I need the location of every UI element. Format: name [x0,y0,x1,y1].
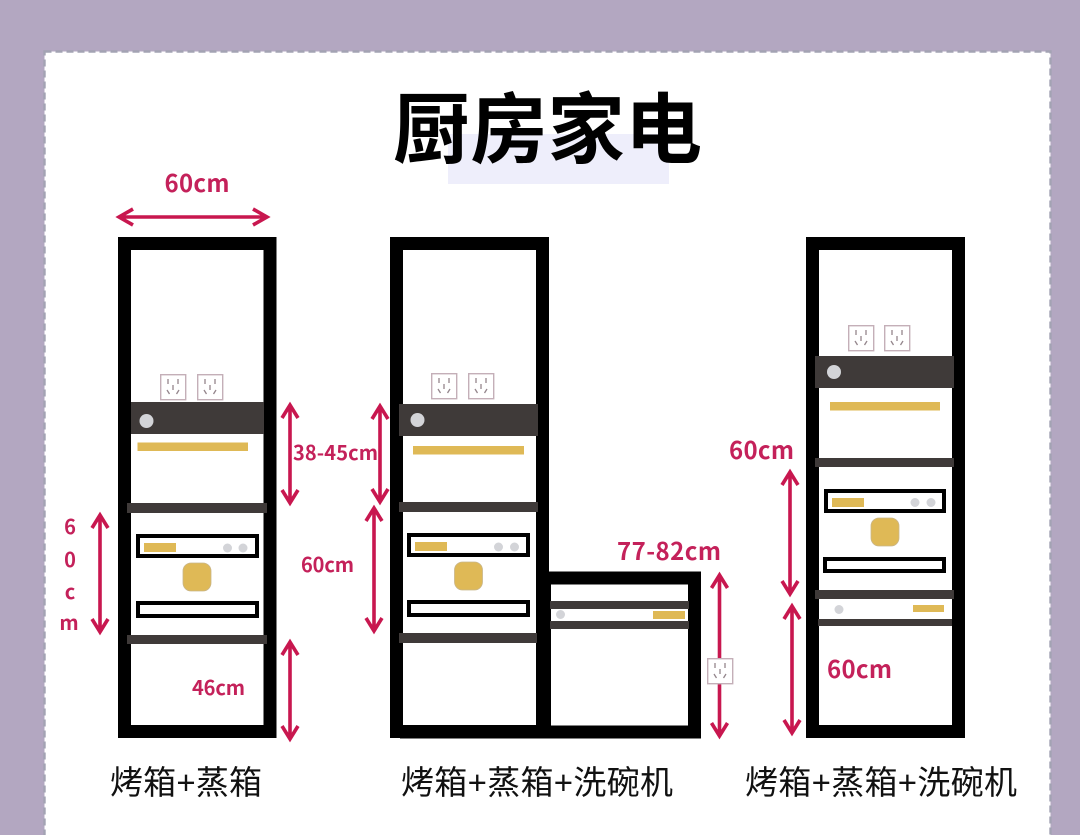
upper shelf 1 [127,503,267,513]
dimension: vertical 60cm: 6 [64,511,76,540]
dimension: vertical 60cm: 0 [64,544,76,573]
range hood 3 [815,356,954,410]
dimension: 60cm column 3 lower [784,606,892,733]
sockets 1 [161,375,223,400]
lower shelf 3 [815,590,954,599]
oven and steamer 3 [825,491,944,571]
dishwasher strip 3 [818,605,952,626]
sockets 3 [849,326,910,351]
dimension: 46cm [192,642,298,739]
dimension: 60cm column 3 lower: 60cm [827,650,892,685]
dimension: 38-45cm bracket on column 2 [372,406,388,502]
caption 1: 烤箱+蒸箱 [110,764,262,801]
lower shelf 1 [127,635,267,644]
dimension: 60cm column 3 upper: 60cm [729,431,794,466]
dimension: top width 60cm [119,164,267,225]
range hood 2 [399,404,538,454]
dimension: 60cm column 3 upper [729,431,798,594]
dimension: 38-45cm [282,405,378,503]
upper shelf 3 [815,458,954,467]
dimension: 60cm column 2 [301,508,382,631]
caption 3: 烤箱+蒸箱+洗碗机 [745,764,1017,801]
dimension: 77-82cm with socket [617,532,733,736]
dimension: vertical 60cm [59,511,108,636]
diagram 3: tall stack [812,244,958,732]
title with highlight: 厨房家电 [393,69,702,180]
cabinet frame 2 [396,244,542,732]
dishwasher cabinet [400,572,694,738]
range hood 1 [131,402,264,451]
dimension: 38-45cm: 38-45cm [293,437,378,466]
caption 2: 烤箱+蒸箱+洗碗机 [401,764,673,801]
sockets 2 [432,374,494,399]
oven and steamer 1 [138,536,257,616]
cabinet frame 3 [812,244,958,732]
upper shelf 2 [399,502,538,512]
dimension: 77-82cm with socket: 77-82cm [617,532,721,567]
diagram 2: oven + steamer + dishwasher [396,244,694,738]
lower shelf 2 [399,633,538,643]
dimension: top width 60cm: 60cm [164,164,230,199]
dimension: 46cm: 46cm [192,672,245,701]
dimension: vertical 60cm: m [59,607,79,636]
cabinet frame 1 [124,244,270,732]
diagram 1: oven + steamer [124,244,270,732]
oven and steamer 2 [409,535,528,615]
dimension: vertical 60cm: c [65,576,75,605]
dimension: 60cm column 2: 60cm [301,549,354,578]
